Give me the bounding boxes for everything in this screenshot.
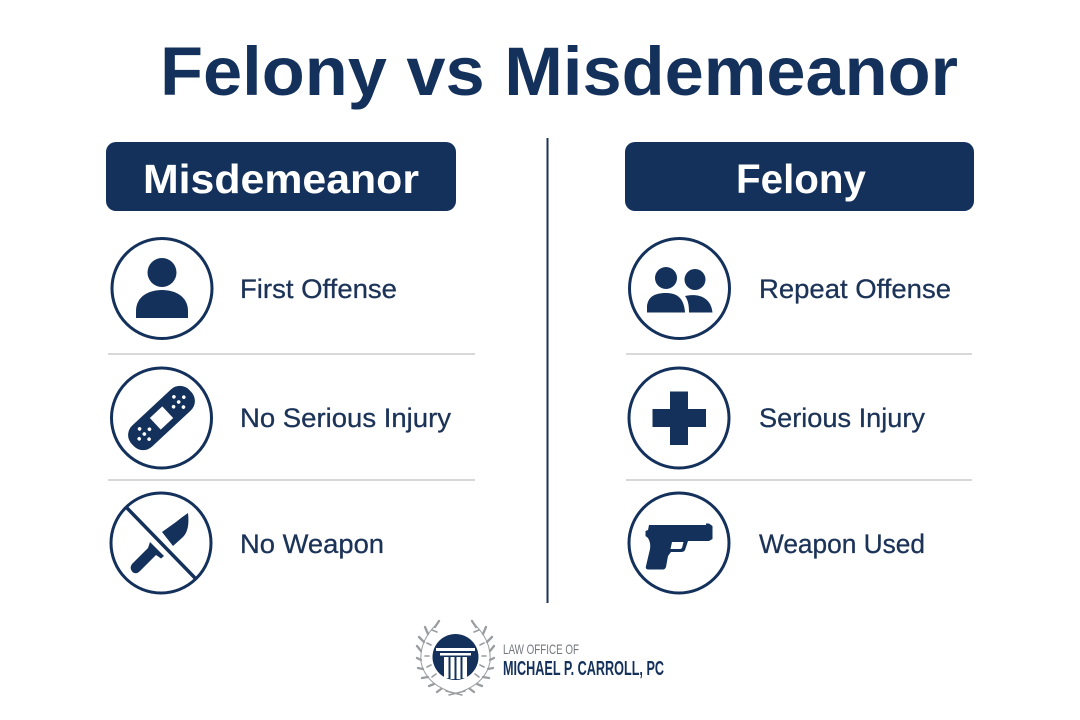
title: Felony vs Misdemeanor [160,33,958,110]
heading: felony: Felony [736,156,866,202]
heading: felony [625,142,974,211]
icon: two people [630,238,730,338]
logo text: LAW OFFICE OF [503,641,579,657]
logo text [503,641,664,680]
heading: misdemeanor: Misdemeanor [143,156,419,202]
panel: felony [625,142,974,593]
heading: misdemeanor [106,142,456,211]
text: weapon used: Weapon Used [759,529,925,559]
icon: medical cross [629,368,729,468]
icon: bandage [112,368,212,468]
icon: crossed-out knife [111,493,211,593]
panel: misdemeanor [106,142,475,593]
text: no serious injury: No Serious Injury [240,403,452,433]
logo: law office [417,621,664,695]
logo emblem [417,621,494,695]
text: no weapon: No Weapon [240,529,384,559]
text: serious injury: Serious Injury [759,403,925,433]
text: repeat offense: Repeat Offense [759,274,951,304]
logo text: MICHAEL P. CARROLL, PC [503,658,664,680]
icon: handgun [629,493,729,593]
text: first offense: First Offense [240,274,397,304]
icon: single person [112,238,212,338]
